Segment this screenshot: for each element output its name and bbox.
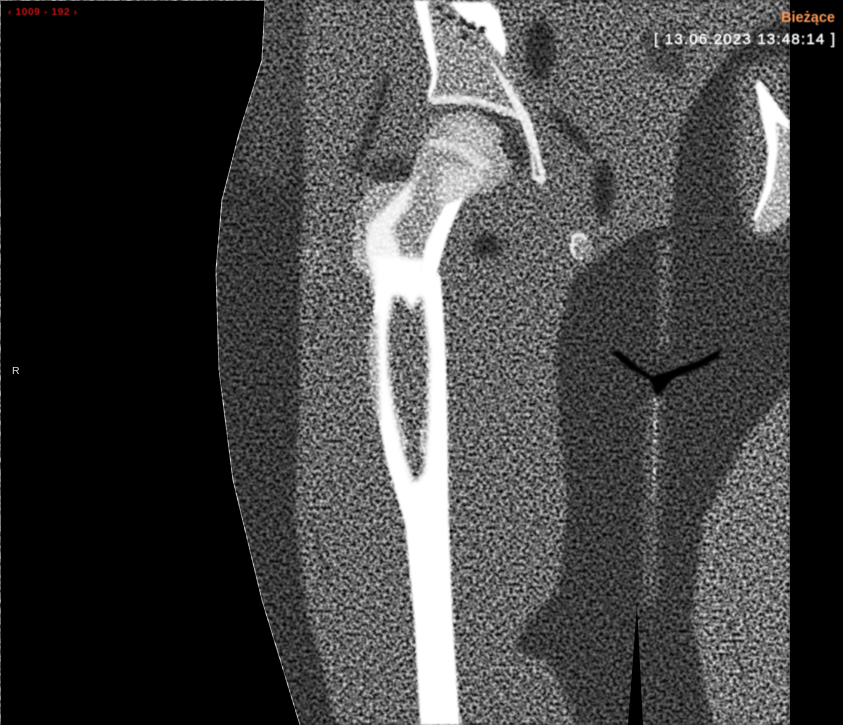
black cleft between thighs	[628, 605, 643, 725]
bright metaphysis	[374, 254, 424, 285]
trochanter lateral bright band	[364, 158, 420, 300]
femoral head	[361, 108, 513, 260]
black perineal air gap	[610, 348, 722, 397]
head bright zone	[445, 121, 493, 158]
body tissue	[200, 0, 800, 725]
upper lateral fat, lighter	[245, 0, 305, 190]
bright muscle patch	[301, 244, 329, 272]
shaft lateral haze	[367, 310, 380, 428]
pubic bone	[570, 233, 593, 260]
fascia streaks	[310, 290, 745, 680]
medullary bright strands	[394, 408, 411, 448]
dark patches in pelvic muscle	[350, 18, 690, 258]
right muscle	[692, 385, 790, 725]
ilium gray body	[425, 0, 530, 120]
joint space	[423, 104, 530, 170]
orientation marker: R	[12, 365, 20, 377]
inner gray trabecular	[402, 200, 430, 252]
neck medial cortex	[420, 196, 464, 278]
pelvic seam	[658, 240, 672, 350]
medullary cavity	[388, 296, 428, 482]
label: current: Bieżące	[781, 10, 835, 26]
iliac cortex crescent	[752, 80, 790, 222]
skin line	[216, 0, 300, 725]
trabecular holes	[436, 4, 486, 45]
femur and pelvis bones	[352, 0, 546, 725]
ilium cortex left	[413, 0, 437, 100]
right black strip	[790, 0, 843, 725]
date and time: [ 13.06.2023 13:48:14 ]	[654, 31, 835, 48]
thigh seam	[642, 398, 662, 610]
iliac body	[752, 122, 790, 234]
iliac bone	[752, 80, 790, 232]
slice label: ‹ 1009 - 192 ›	[8, 7, 77, 18]
subcutaneous fat layer	[200, 0, 800, 725]
ilium cortex upper right	[450, 2, 507, 58]
inner dark fat region	[514, 134, 681, 725]
iliac halo	[735, 55, 790, 238]
acetabular cortex	[487, 55, 546, 185]
acetabular roof	[427, 95, 522, 122]
femoral shaft	[371, 275, 460, 725]
muscle mass	[295, 0, 790, 725]
